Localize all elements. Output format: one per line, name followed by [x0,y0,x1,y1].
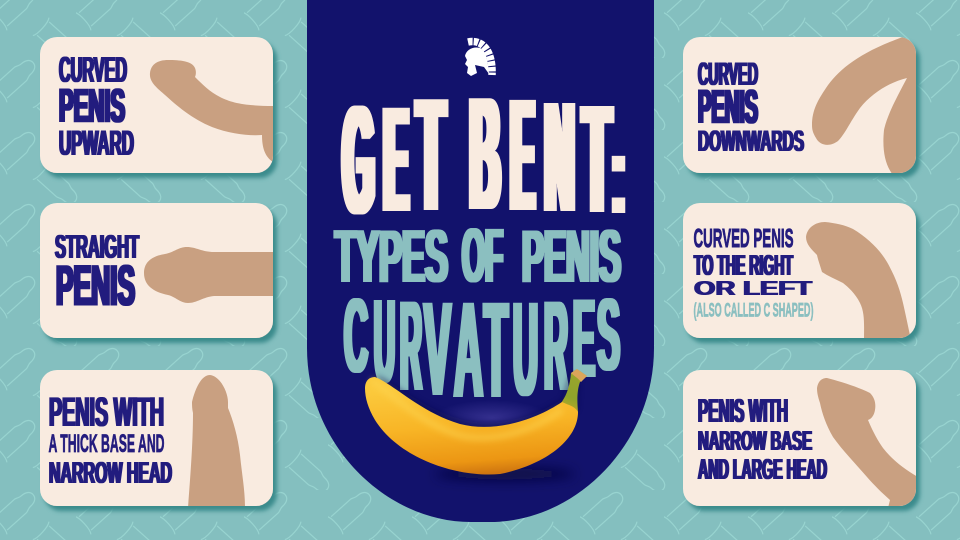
label: penis with narrow base and large head: PENIS WITH [698,392,788,429]
illustration: curved downward shape [812,37,918,175]
subtitle: curvatures [344,274,620,427]
label: curved penis downwards: PENIS [698,80,758,132]
panel: narrow base large head [683,370,918,508]
panel: curved right or left: (ALSO CALLED C SHAPED) [694,300,814,322]
subtitle: curvatures: R [544,275,568,418]
panel: curved upward: CURVED [59,49,127,90]
label: curved penis downwards [698,56,804,158]
label: curved penis to the right or left: OR LEFT [694,278,812,300]
subtitle: types of penis: TYPES [335,214,448,298]
title: GET BENT [343,64,625,246]
subtitle: curvatures: A [454,274,483,427]
label: penis with narrow base and large head: NARROW BASE [698,425,812,456]
icon: banana [365,369,587,480]
panel: curved right or left [683,203,916,340]
title: GET BENT: B [470,64,500,244]
label: straight penis [55,228,139,316]
title: GET BENT: N [545,70,574,245]
label: curved penis upward [59,49,134,163]
panel: curved downwards [683,37,918,175]
label: penis with a thick base and narrow head: PENIS WITH [49,388,164,435]
illustration: straight shape [144,247,275,303]
subtitle: types of penis: OF [462,213,503,299]
panel: straight: STRAIGHT [55,228,139,265]
icon: spartan helmet logo [465,42,492,76]
subtitle: curvatures: T [484,274,508,427]
panel: straight: PENIS [56,254,135,316]
text: S [597,277,620,392]
illustration: curved upward shape [150,60,275,163]
panel: thick base narrow head [40,370,273,508]
subtitle: curvatures: U [374,275,395,408]
text: : [612,111,625,237]
illustration: large head shape [817,378,918,508]
label: curved penis downwards: CURVED [698,56,758,92]
title: GET BENT: E [384,75,408,243]
label: curved penis to the right or left: CURVED PENIS [694,223,794,253]
title: GET BENT: T [417,65,445,245]
illustration: C shaped curve [806,222,911,340]
subtitle: curvatures: C [344,277,368,395]
title: GET BENT: E [511,65,534,244]
text: PENIS [522,214,621,298]
label: penis with a thick base and narrow head [48,388,172,490]
label: penis with a thick base and narrow head: A THICK BASE AND [48,430,164,458]
label: curved penis upward: PENIS [59,80,125,132]
label: curved penis to the right or left: TO THE RIGHT [694,250,793,282]
panel: narrow base large head: AND LARGE HEAD [698,454,827,486]
subtitle: curvatures: R [400,275,422,418]
subtitle: curvatures: V [424,275,451,424]
text: T [583,73,611,245]
subtitle: curvatures: E [573,276,595,401]
panel: curved upward [40,37,275,173]
panel: central navy title banner [307,0,654,522]
panel: curved upward: UPWARD [59,124,134,163]
label: curved penis downwards: DOWNWARDS [698,125,804,158]
title: GET BENT: G [343,74,374,246]
panel: straight [40,203,275,338]
illustration: thick base shape [188,375,245,508]
label: curved penis to the right or left [694,223,814,322]
label: penis with narrow base and large head [698,392,827,486]
subtitle: curvatures: U [513,275,538,424]
label: penis with a thick base and narrow head: NARROW HEAD [49,455,172,490]
